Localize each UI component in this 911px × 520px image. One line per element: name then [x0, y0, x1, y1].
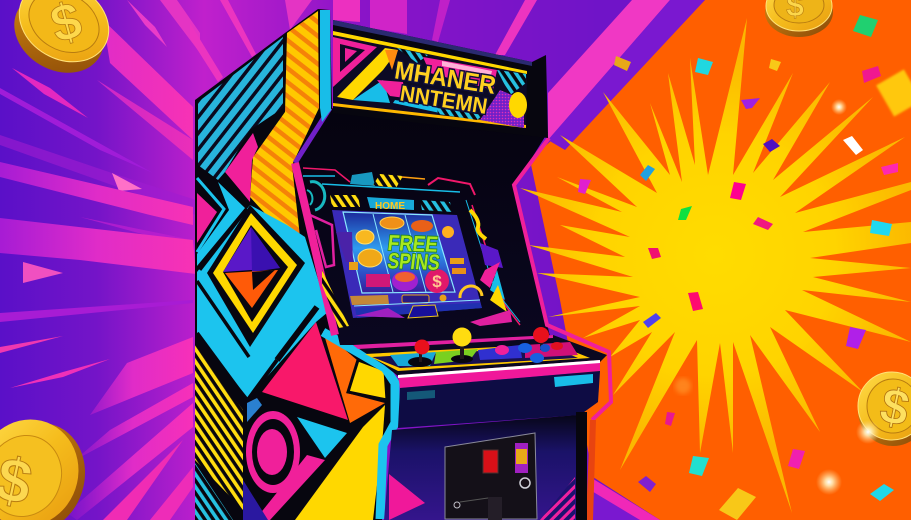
- marquee title text: NNTEMN: [398, 80, 489, 119]
- diamond emblem: [207, 205, 305, 347]
- cabinet lower body: [384, 412, 587, 520]
- reel symbols: $: [432, 272, 442, 291]
- coin: right: [858, 372, 911, 446]
- marquee title text: [389, 56, 498, 120]
- cabinet lower fascia: [398, 371, 600, 428]
- concentric circle: [246, 411, 300, 493]
- side panel: blue stripes: [198, 37, 283, 180]
- game screen: [330, 195, 482, 318]
- side panel: pink block: [225, 133, 258, 202]
- reel symbols: [356, 217, 454, 293]
- panel: orange right background: [530, 0, 911, 520]
- free spins text: [384, 230, 443, 275]
- starburst: [520, 18, 911, 513]
- screen bottom bar: [336, 232, 482, 318]
- arcade cabinet: [195, 9, 611, 520]
- cyan cabinet edge: [323, 332, 395, 519]
- coin: bottom left: [0, 419, 85, 520]
- coin slot: [515, 443, 528, 473]
- screen bezel neon trim: [303, 168, 520, 328]
- front face: [298, 108, 552, 345]
- panel: purple left background with rays: [0, 0, 720, 520]
- confetti: [578, 15, 911, 520]
- cyan cabinet top strip: [320, 10, 331, 122]
- red button: [483, 450, 498, 473]
- coin: top right: [765, 0, 833, 37]
- side panel: orange stripes: [250, 11, 319, 237]
- joystick: red left: [408, 340, 432, 367]
- coin: top left: [0, 0, 123, 89]
- free spins text: SPINS: [386, 248, 441, 275]
- joystick: yellow: [451, 328, 473, 363]
- joystick: red right: [533, 327, 549, 350]
- sparkles: [675, 99, 880, 495]
- side panel: cyan chevrons and field: [197, 178, 328, 401]
- pink bezel left: [295, 108, 335, 335]
- free spins text: FREE: [386, 230, 439, 257]
- cabinet side panel silhouette: [195, 9, 397, 520]
- side panel: lower shapes: [195, 322, 387, 520]
- pink front strip: [398, 360, 600, 388]
- marquee title text: MHANER: [393, 56, 498, 100]
- lock knob: [520, 478, 530, 488]
- buttons: [495, 342, 563, 363]
- screen header text: HOME: [375, 201, 405, 212]
- right edge: [514, 138, 611, 520]
- marquee: [333, 20, 548, 138]
- coin door: [445, 433, 537, 520]
- control panel: [353, 327, 607, 388]
